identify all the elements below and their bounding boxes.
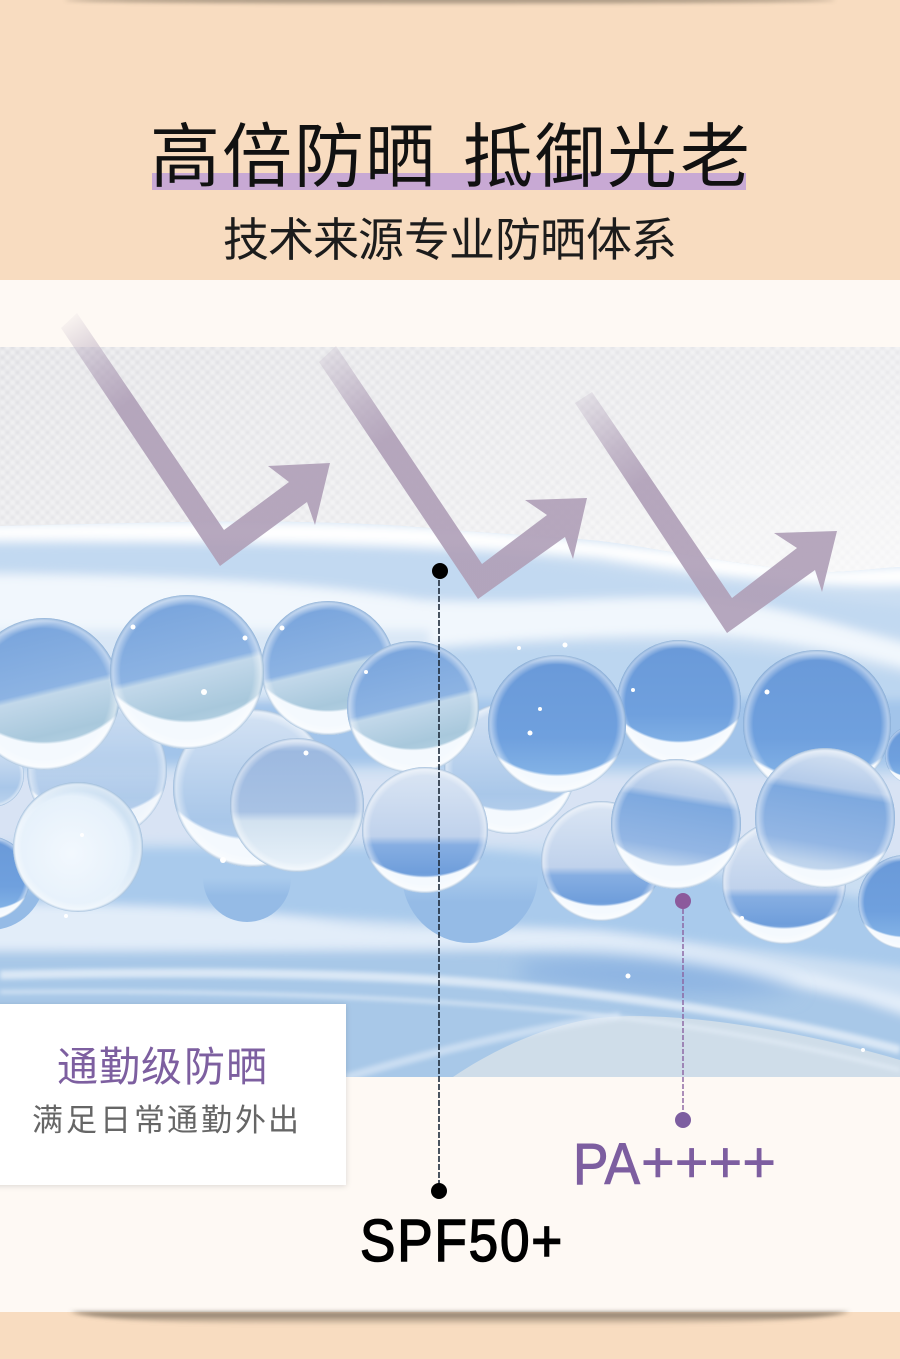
arrow 3 xyxy=(575,392,837,633)
PA leader line xyxy=(675,893,691,1128)
lower blue band xyxy=(0,848,900,970)
deep blue band xyxy=(0,952,900,1090)
bead xyxy=(173,709,331,867)
water layer xyxy=(0,500,900,1090)
bead xyxy=(0,618,120,770)
white band xyxy=(0,574,900,672)
SPF leader line xyxy=(431,563,448,1199)
right blue xyxy=(420,645,900,780)
illustration panel: fabric and water layers xyxy=(0,337,900,1090)
white rim under fabric xyxy=(0,522,900,586)
bead xyxy=(0,836,30,920)
bead xyxy=(27,700,167,840)
beige water floor xyxy=(453,1016,900,1077)
PA label: PA xyxy=(573,1132,640,1197)
bead xyxy=(230,738,364,872)
arrow 2 xyxy=(319,346,587,599)
heading underline xyxy=(152,173,746,190)
front row beads xyxy=(13,738,895,912)
card heading: 通勤级防晒 xyxy=(57,1044,267,1090)
bead xyxy=(541,801,661,921)
bead xyxy=(611,759,741,889)
bead xyxy=(858,855,900,949)
water beads xyxy=(0,595,900,949)
pale blue band xyxy=(0,550,900,631)
mid blue band xyxy=(0,700,900,765)
pale streaks xyxy=(0,973,900,1078)
bottom band xyxy=(0,1312,900,1359)
card description: 满足日常通勤外出 xyxy=(32,1103,299,1138)
bead xyxy=(110,595,264,749)
bead xyxy=(347,641,479,773)
pale band xyxy=(0,902,900,1020)
PA label xyxy=(573,1130,776,1197)
top header band xyxy=(0,0,900,280)
SPF label: SPF50+ xyxy=(360,1207,564,1274)
bead xyxy=(488,655,626,793)
bead xyxy=(261,601,395,735)
subtitle: 技术来源专业防晒体系 xyxy=(223,214,677,266)
PA label: ++++ xyxy=(641,1130,776,1195)
shadow discs under beads xyxy=(0,885,536,943)
left light xyxy=(88,628,432,702)
arrow 1 xyxy=(61,313,330,566)
bead xyxy=(743,650,891,798)
info card xyxy=(0,1004,346,1185)
lavender band xyxy=(0,775,900,860)
bead xyxy=(444,702,576,834)
bead xyxy=(885,725,900,785)
bead xyxy=(13,782,143,912)
bead xyxy=(722,820,846,944)
top row beads xyxy=(0,595,891,798)
bead xyxy=(362,767,488,893)
back row beads xyxy=(0,700,900,949)
bead highlights xyxy=(64,624,865,1052)
bead xyxy=(617,640,741,764)
fabric texture xyxy=(0,347,900,569)
title: 高倍防晒抵御光老 xyxy=(150,118,750,196)
bead xyxy=(0,743,24,807)
bead xyxy=(755,748,895,888)
